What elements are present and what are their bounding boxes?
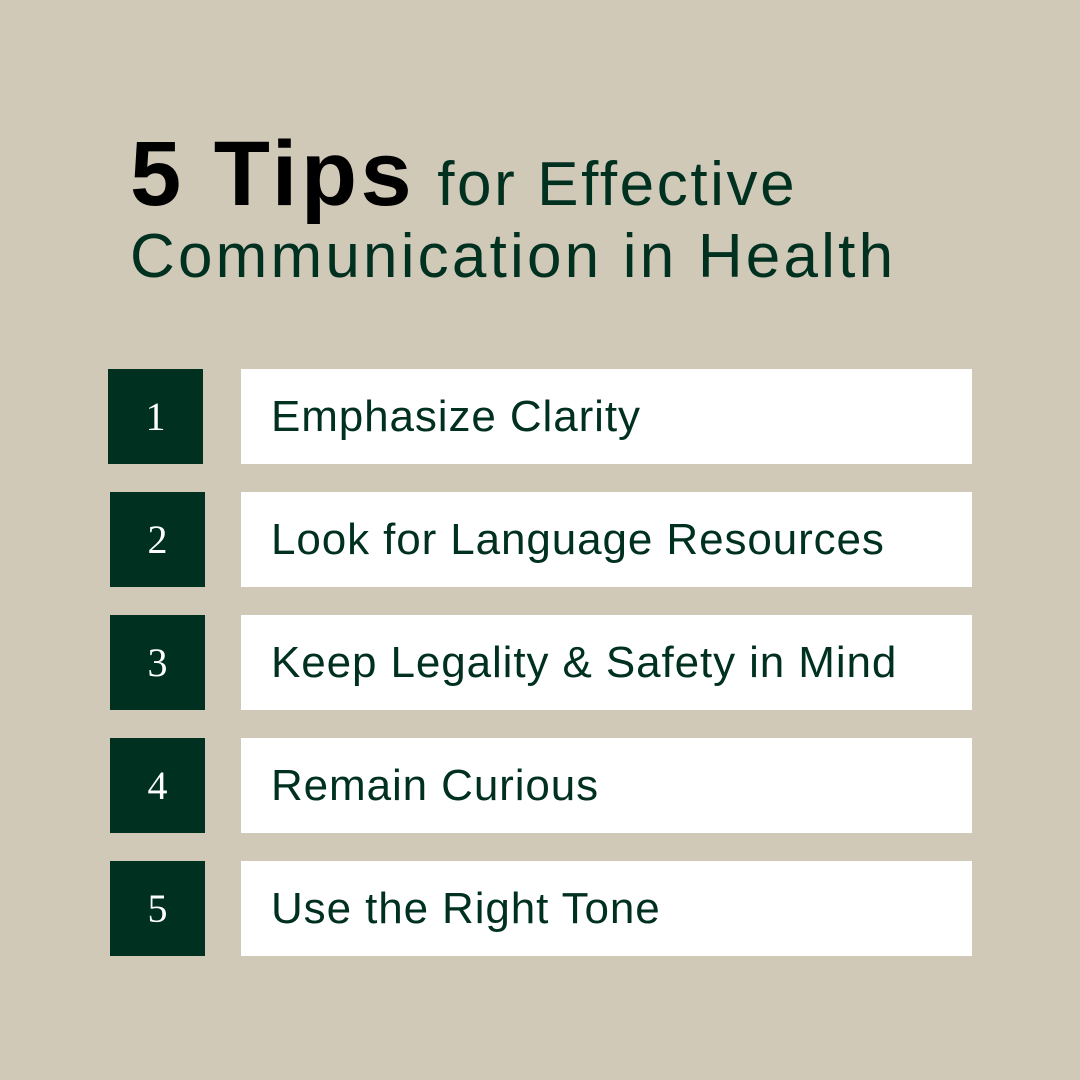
tip 2: 2 bbox=[148, 517, 168, 562]
tip 4 bbox=[110, 738, 972, 833]
tip 1: Emphasize Clarity bbox=[271, 392, 641, 440]
tip 4: Remain Curious bbox=[271, 760, 599, 810]
tip 5: Use the Right Tone bbox=[271, 884, 661, 932]
tip 1 bbox=[108, 369, 972, 464]
tip 5: 5 bbox=[148, 886, 168, 931]
tip 3: Keep Legality & Safety in Mind bbox=[271, 638, 897, 686]
tip 3 bbox=[110, 615, 972, 710]
tip 1: 1 bbox=[146, 394, 166, 439]
tip 2 bbox=[110, 492, 972, 587]
title bbox=[130, 123, 896, 291]
title: Communication in Health bbox=[130, 222, 896, 291]
tip 5 bbox=[110, 861, 972, 956]
tip 4: 4 bbox=[148, 763, 168, 808]
title: 5 Tips for Effective bbox=[130, 123, 797, 225]
tip 2: Look for Language Resources bbox=[271, 514, 885, 564]
tip 3: 3 bbox=[148, 640, 168, 685]
